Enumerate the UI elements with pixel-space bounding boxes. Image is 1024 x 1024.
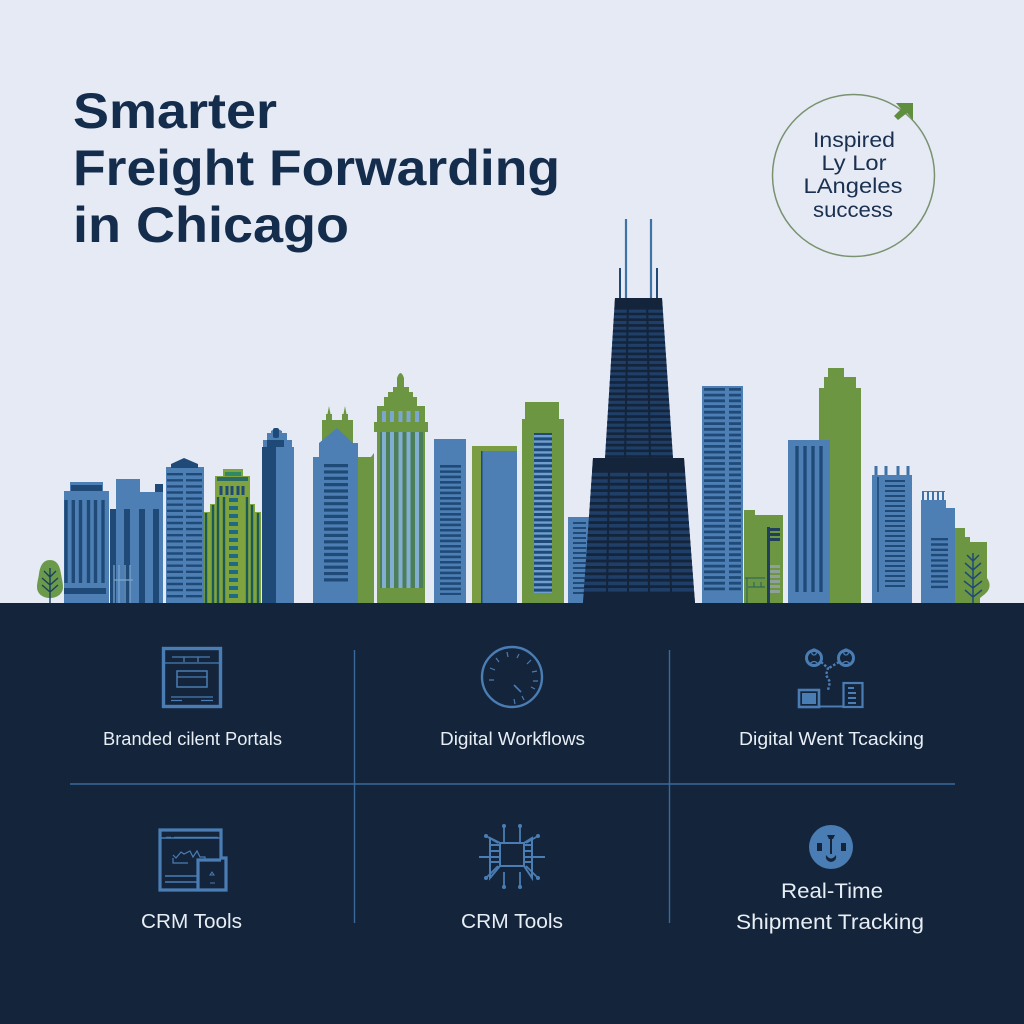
building 2: [110, 479, 163, 603]
callout text: [804, 129, 902, 222]
tree right: [964, 553, 982, 603]
icon: gauge clock: [482, 647, 542, 707]
title: [73, 83, 560, 253]
title: Freight Forwarding: [73, 140, 560, 196]
hancock short antennas: [620, 268, 657, 298]
label: real-time shipment tracking: [736, 880, 924, 934]
label: digital workflows: Digital Workflows: [440, 729, 585, 749]
building 17: [921, 491, 955, 603]
title: in Chicago: [73, 197, 349, 253]
building 6 green annex: [358, 453, 374, 603]
label: CRM tools: CRM Tools: [141, 911, 242, 933]
label: real-time shipment tracking: Shipment Tracking: [736, 911, 924, 934]
icon: client portal window: [164, 648, 220, 706]
building 4 green tiered: [204, 469, 261, 603]
building 15 green tall: [819, 368, 861, 603]
building 7 green crown tower: [374, 373, 428, 603]
building 16: [872, 466, 912, 603]
building 3: [166, 458, 204, 603]
callout text: Inspired: [813, 129, 895, 152]
building 9: [472, 446, 517, 603]
icon: green arrow: [894, 103, 913, 120]
panel: services: [0, 603, 1024, 1024]
title: Smarter: [73, 83, 277, 139]
label: branded client portals: Branded cilent Portals: [103, 729, 282, 749]
callout text: LAngeles: [804, 175, 902, 198]
grid dividers: [70, 650, 955, 923]
tree left: [37, 560, 63, 603]
hancock antennas: [626, 219, 651, 298]
hancock tower: [580, 219, 700, 603]
icon: real-time tracking badge: [809, 825, 853, 869]
building 11: [568, 517, 590, 603]
building 8: [434, 439, 466, 603]
building 6 blue: [313, 428, 358, 603]
icon: CRM dashboard: [160, 830, 226, 890]
hancock lower section: [580, 458, 700, 603]
skyline: [37, 219, 990, 603]
building 12: [702, 386, 743, 603]
hancock upper section: [605, 298, 673, 458]
callout text: Ly Lor: [822, 152, 886, 175]
building 6 green back with spires: [322, 406, 353, 445]
label: digital went tracking: Digital Went Tcacking: [739, 729, 924, 749]
building 10: [522, 402, 564, 603]
building 1: [64, 482, 109, 603]
label: real-time shipment tracking: Real-Time: [781, 880, 883, 903]
building 14: [788, 440, 830, 603]
callout: inspired by Los Angeles success: [772, 94, 934, 256]
label: CRM tools second: CRM Tools: [461, 911, 563, 933]
icon: digital tracking people and desks: [799, 649, 862, 707]
callout text: success: [813, 199, 893, 222]
building 18 green: [955, 528, 990, 603]
icon: circuit chip: [479, 824, 545, 889]
building 5: [262, 428, 294, 603]
building 13: [744, 510, 783, 603]
